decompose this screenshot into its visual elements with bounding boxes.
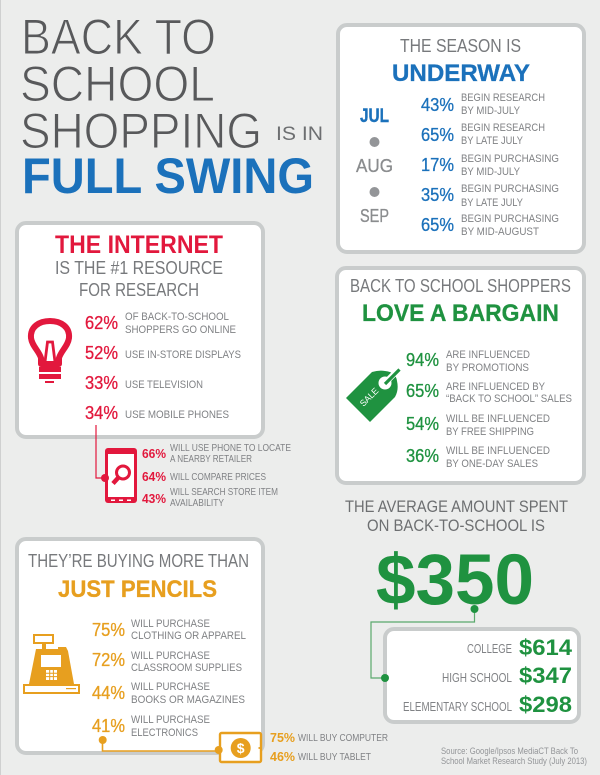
stat list: bargain influences: BY PROMOTIONS	[446, 362, 529, 374]
heading: the season is underway: UNDERWAY	[392, 60, 530, 87]
stat list: purchases: CLOTHING OR APPAREL	[131, 630, 246, 642]
row: high school: $347	[519, 663, 572, 688]
heading: average amount spent: ON BACK-TO-SCHOOL IS	[367, 516, 545, 535]
stat list: season timing: 17%	[421, 155, 454, 175]
heading: the season is underway	[392, 35, 530, 87]
stat list: phone uses: A NEARBY RETAILER	[170, 453, 252, 465]
month timeline	[356, 106, 393, 226]
stat list: purchases: 75%	[92, 620, 125, 640]
big number: $350: $350	[376, 541, 534, 620]
stat list: bargain influences	[406, 349, 572, 470]
source note: Source: Google/Ipsos MediaCT Back To	[441, 746, 578, 756]
stat list: season timing: BEGIN RESEARCH	[461, 122, 545, 134]
stat list: research resources: OF BACK-TO-SCHOOL	[125, 311, 229, 323]
stat list: purchases: WILL PURCHASE	[131, 681, 210, 693]
source note	[441, 746, 587, 766]
icon: tablet with dollar	[215, 733, 261, 762]
stat list: bargain influences: ARE INFLUENCED BY	[446, 381, 546, 393]
stat list: research resources	[85, 311, 241, 423]
stat list: bargain influences: ARE INFLUENCED	[446, 349, 530, 361]
icon: phone with magnifier	[101, 448, 137, 503]
stat list: bargain influences: “BACK TO SCHOOL” SALES	[446, 393, 572, 405]
row: elementary school: $298	[519, 692, 572, 717]
stat list: season timing: BEGIN PURCHASING	[461, 153, 559, 165]
heading: they're buying more than just pencils: JUST PENCILS	[58, 576, 217, 603]
stat list: season timing: BY MID-JULY	[461, 105, 521, 117]
stat list: research resources: USE MOBILE PHONES	[125, 409, 229, 421]
stat list: bargain influences: 36%	[406, 446, 439, 466]
icon: light bulb	[31, 321, 69, 383]
stat list: electronics purchases	[270, 730, 388, 764]
row: college	[467, 635, 573, 660]
stat list: bargain influences: WILL BE INFLUENCED	[446, 445, 550, 457]
title: IS IN	[276, 124, 323, 145]
stat list: research resources: 34%	[85, 403, 118, 423]
stat list: season timing: BEGIN PURCHASING	[461, 213, 559, 225]
stat list: purchases: WILL PURCHASE	[131, 618, 210, 630]
stat list: phone uses: 66%	[142, 446, 166, 461]
stat list: season timing: BY MID-JULY	[461, 166, 521, 178]
title: SCHOOL	[20, 56, 215, 112]
panel: love a bargain	[337, 268, 584, 483]
heading: average amount spent	[345, 497, 568, 535]
month timeline: AUG	[356, 156, 393, 176]
stat list: purchases: 41%	[92, 716, 125, 736]
icon: sale tag: SALE	[358, 386, 380, 408]
stat list: phone uses: 64%	[142, 469, 166, 484]
heading: they're buying more than just pencils	[28, 550, 249, 603]
connector: mobile phones to phone icon	[96, 425, 105, 478]
row: college: COLLEGE	[467, 642, 512, 656]
stat list: season timing: BY LATE JULY	[461, 135, 524, 147]
row: college: $614	[519, 635, 573, 660]
stat list: season timing: 35%	[421, 185, 454, 205]
row: elementary school: ELEMENTARY SCHOOL	[403, 700, 512, 714]
stat list: season timing: BY LATE JULY	[461, 197, 524, 209]
stat list: bargain influences: 54%	[406, 414, 439, 434]
stat list: electronics purchases: WILL BUY COMPUTER	[298, 732, 388, 744]
panel: the season is underway	[338, 25, 584, 252]
stat list: purchases: CLASSROOM SUPPLIES	[131, 662, 242, 674]
icon: tablet with dollar: $	[237, 740, 245, 756]
stat list: research resources: SHOPPERS GO ONLINE	[125, 324, 236, 336]
stat list: purchases: ELECTRONICS	[131, 727, 198, 739]
month timeline: SEP	[360, 206, 389, 226]
stat list: electronics purchases: WILL BUY TABLET	[298, 751, 371, 763]
heading: they're buying more than just pencils: THEY’RE BUYING MORE THAN	[28, 550, 249, 571]
heading: back to school shoppers love a bargain: LOVE A BARGAIN	[362, 300, 559, 327]
stat list: purchases: 72%	[92, 650, 125, 670]
stat list: phone uses: AVAILABILITY	[170, 497, 224, 509]
row: elementary school	[403, 692, 572, 717]
stat list: bargain influences: 65%	[406, 381, 439, 401]
stat list: research resources: USE IN-STORE DISPLAYS	[125, 349, 241, 361]
heading: back to school shoppers love a bargain	[350, 275, 571, 327]
stat list: purchases: BOOKS OR MAGAZINES	[131, 694, 245, 706]
heading: the internet is the #1 resource: THE INTERNET	[55, 231, 223, 259]
month timeline: JUL	[360, 106, 389, 127]
stat list: phone uses: WILL USE PHONE TO LOCATE	[170, 442, 291, 454]
stat list: purchases: WILL PURCHASE	[131, 650, 210, 662]
stat list: bargain influences: WILL BE INFLUENCED	[446, 413, 550, 425]
icon: sale tag	[346, 369, 400, 422]
stat list: season timing	[421, 92, 559, 238]
stat list: season timing: BEGIN RESEARCH	[461, 92, 545, 104]
stat list: bargain influences: BY FREE SHIPPING	[446, 426, 534, 438]
stat list: purchases: WILL PURCHASE	[131, 714, 210, 726]
stat list: phone uses: 43%	[142, 491, 166, 506]
row: high school: HIGH SCHOOL	[442, 671, 512, 685]
panel: spend by school level	[385, 629, 579, 722]
panel: just pencils	[17, 539, 263, 753]
title: SHOPPING	[20, 103, 262, 159]
stat list: research resources: 33%	[85, 373, 118, 393]
stat list: season timing: 65%	[421, 215, 454, 235]
stat list: season timing: BY MID-AUGUST	[461, 226, 539, 238]
stat list: phone uses: WILL COMPARE PRICES	[170, 471, 266, 483]
stat list: season timing: 43%	[421, 95, 454, 115]
title: FULL SWING	[22, 148, 314, 204]
heading: the internet is the #1 resource: FOR RESEARCH	[79, 279, 199, 300]
stat list: phone uses	[142, 442, 291, 509]
stat list: electronics purchases: 46%	[270, 749, 295, 764]
heading: the internet is the #1 resource	[55, 231, 223, 300]
stat list: season timing: 65%	[421, 125, 454, 145]
row: high school	[442, 663, 572, 688]
stat list: research resources: USE TELEVISION	[125, 379, 203, 391]
stat list: electronics purchases: 75%	[270, 730, 295, 745]
title: BACK TO	[21, 9, 216, 65]
panel: the internet	[17, 223, 263, 437]
connector: electronics to tablet	[99, 736, 219, 751]
connector: $350 to breakdown panel	[371, 609, 474, 678]
heading: the season is underway: THE SEASON IS	[400, 35, 521, 56]
stat list: season timing: BEGIN PURCHASING	[461, 183, 559, 195]
stat list: phone uses: WILL SEARCH STORE ITEM	[170, 486, 278, 498]
heading: average amount spent: THE AVERAGE AMOUNT SPENT	[345, 497, 568, 516]
icon: cash register	[23, 635, 80, 694]
stat list: purchases	[92, 618, 246, 739]
stat list: bargain influences: 94%	[406, 350, 439, 370]
heading: the internet is the #1 resource: IS THE #1 RESOURCE	[55, 257, 223, 278]
stat list: research resources: 62%	[85, 313, 118, 333]
title	[20, 9, 323, 204]
stat list: research resources: 52%	[85, 343, 118, 363]
connector dots	[381, 605, 478, 682]
stat list: purchases: 44%	[92, 683, 125, 703]
stat list: bargain influences: BY ONE-DAY SALES	[446, 458, 538, 470]
